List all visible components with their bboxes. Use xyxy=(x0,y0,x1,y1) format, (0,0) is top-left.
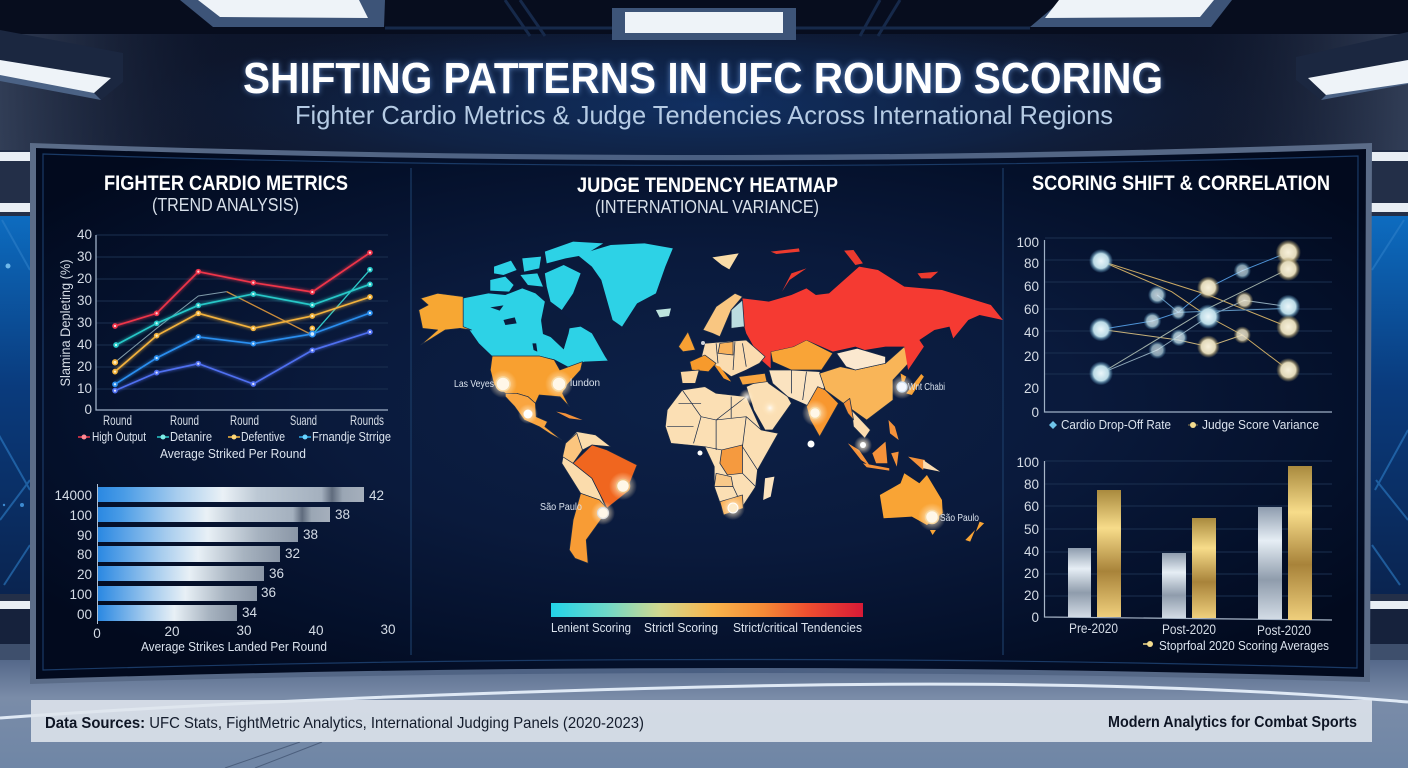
region: Argentina and Chile xyxy=(569,493,608,563)
bar chart: scoring averages: 80 xyxy=(1024,477,1039,492)
bar chart: scoring averages: 20 xyxy=(1024,566,1039,581)
hanging light: right xyxy=(1296,32,1408,100)
bar chart: average strikes landed: 34 xyxy=(242,605,258,620)
footer bar xyxy=(31,700,1372,742)
city labels: Las Veyes xyxy=(454,378,494,390)
line chart: stamina depletion xyxy=(58,227,388,428)
city labels: São Paulo xyxy=(940,512,979,524)
bar chart: average strikes landed: 30 xyxy=(236,623,252,638)
city labels: lundon xyxy=(570,377,600,389)
line chart: stamina depletion: Round xyxy=(170,413,199,428)
region: Eastern Europe xyxy=(701,340,765,377)
region: France xyxy=(690,355,716,372)
region: Scandinavia xyxy=(703,293,742,337)
line chart: stamina depletion: 30 xyxy=(77,315,92,330)
region: South America cream xyxy=(562,432,611,510)
heading: scoring shift and correlation: SCORING SHIFT & CORRELATION xyxy=(1032,172,1330,195)
line chart: stamina depletion: 20 xyxy=(77,359,92,374)
city labels: Wnt Chabi xyxy=(908,381,945,393)
scatter plot: cardio drop-off vs judge variance: 0 xyxy=(1031,405,1039,420)
bar chart: average strikes landed: 100 xyxy=(69,508,92,523)
line chart: stamina depletion: 30 xyxy=(77,249,92,264)
region: China xyxy=(820,347,910,420)
legend: line chart: Defentive xyxy=(241,429,285,444)
scatter plot: cardio drop-off vs judge variance: 60 xyxy=(1024,302,1039,317)
bar chart: scoring averages: 40 xyxy=(1024,544,1039,559)
line chart: stamina depletion: Rounds xyxy=(350,413,384,428)
scatter plot: cardio drop-off vs judge variance: 100 xyxy=(1016,235,1039,250)
floor xyxy=(0,660,1408,768)
region: South Africa xyxy=(720,495,743,515)
ceiling light: top left xyxy=(180,0,385,27)
world map xyxy=(419,242,1003,563)
bar chart: average strikes landed: 38 xyxy=(335,507,350,522)
caption: line chart: Average Striked Per Round xyxy=(160,446,306,461)
region: UK xyxy=(678,332,695,352)
subheading: international variance: (INTERNATIONAL VARIANCE) xyxy=(595,197,819,217)
ceiling light: top right xyxy=(1030,0,1232,27)
dark inlets of Canada xyxy=(490,305,571,352)
region: Myanmar xyxy=(843,398,854,420)
region: Africa xyxy=(665,387,778,513)
region: Papua New Guinea xyxy=(923,460,940,472)
line chart: stamina depletion: 40 xyxy=(77,227,92,242)
legend: scatter plot: Judge Score Variance xyxy=(1202,417,1319,432)
data sources: Data Sources: UFC Stats, FightMetric Analytics, International Judging Panels (2020-2023) xyxy=(45,715,644,732)
side wall display: right xyxy=(1370,150,1408,670)
ceiling light: top center xyxy=(612,8,796,40)
bar chart: average strikes landed: 36 xyxy=(269,566,284,581)
region: Madagascar xyxy=(763,477,774,500)
scatter plot: cardio drop-off vs judge variance: 20 xyxy=(1024,381,1039,396)
city labels xyxy=(454,377,979,524)
hanging light: left xyxy=(0,30,123,100)
region: Russian islands xyxy=(771,248,938,292)
heatmap legend: Lenient Scoring xyxy=(551,620,631,635)
line chart: stamina depletion: Round xyxy=(230,413,259,428)
region: India xyxy=(806,387,838,437)
bar chart: scoring averages: Pre-2020 xyxy=(1069,621,1118,636)
scatter plot: cardio drop-off vs judge variance: 80 xyxy=(1024,256,1039,271)
scatter plot: cardio drop-off vs judge variance: 20 xyxy=(1024,349,1039,364)
bar chart: average strikes landed: 14000 xyxy=(54,488,92,503)
bar chart: scoring averages: 60 xyxy=(1024,499,1039,514)
bar chart: average strikes landed: 100 xyxy=(69,587,92,602)
line chart: stamina depletion: 40 xyxy=(77,337,92,352)
bar chart: scoring averages: 50 xyxy=(1024,522,1039,537)
region: Angola xyxy=(714,473,733,487)
scatter plot: cardio drop-off vs judge variance xyxy=(1016,235,1332,420)
panel: judge tendency heatmap xyxy=(419,174,1003,635)
region: Brazil xyxy=(573,445,637,508)
city markers xyxy=(489,341,946,531)
heatmap legend: Strict/critical Tendencies xyxy=(733,620,862,635)
bar chart: average strikes landed xyxy=(54,484,396,641)
region: Spain xyxy=(680,370,699,383)
main screen frame xyxy=(30,143,1372,684)
panel: fighter cardio metrics xyxy=(54,172,396,654)
region: DR Congo xyxy=(720,445,742,475)
panel: scoring shift and correlation xyxy=(1016,172,1332,653)
city labels: São Paulo xyxy=(540,501,582,513)
subheading: trend analysis: (TREND ANALYSIS) xyxy=(152,195,299,215)
line chart: stamina depletion: Slamina Depleting (%) xyxy=(58,260,73,386)
bar chart: average strikes landed: 90 xyxy=(77,528,92,543)
region: Mexico and Central America xyxy=(505,393,562,440)
subtitle: Fighter Cardio Metrics & Judge Tendencies Across International Regions xyxy=(295,100,1113,130)
bar chart: scoring averages: Post-2020 xyxy=(1257,623,1311,638)
line chart: stamina depletion: Round xyxy=(103,413,132,428)
line chart: stamina depletion: 30 xyxy=(77,293,92,308)
region: Svalbard xyxy=(712,253,739,269)
region: Caribbean xyxy=(556,412,582,420)
bar chart: scoring averages xyxy=(1016,455,1332,638)
bar chart: scoring averages: 0 xyxy=(1031,610,1039,625)
region: Finland xyxy=(731,300,744,328)
region: Japan and Korea xyxy=(901,373,924,395)
legend: line chart: High Output xyxy=(92,429,146,444)
caption: bar chart: Average Strikes Landed Per Round xyxy=(141,639,327,654)
region: Middle East xyxy=(746,378,791,430)
region: Indonesia xyxy=(848,420,925,471)
legend: line chart xyxy=(78,429,391,444)
region: Russia xyxy=(742,267,1003,370)
line chart: stamina depletion: 0 xyxy=(84,402,92,417)
legend: scatter plot: Cardio Drop-Off Rate xyxy=(1061,417,1171,432)
heatmap legend xyxy=(551,603,863,635)
bar chart: average strikes landed: 38 xyxy=(303,527,318,542)
bar chart: average strikes landed: 32 xyxy=(285,546,300,561)
region: Canada mainland xyxy=(463,288,608,367)
region: Mongolia xyxy=(837,348,886,370)
bar chart: average strikes landed: 42 xyxy=(369,488,384,503)
region: Turkey xyxy=(739,373,767,385)
region: USA xyxy=(490,356,582,407)
region: Iceland xyxy=(656,308,671,317)
legend: line chart: Frnandje Strrige xyxy=(312,429,391,444)
bar chart: average strikes landed: 30 xyxy=(380,622,396,637)
region: Kazakhstan xyxy=(771,340,833,370)
region: Australia xyxy=(880,473,943,525)
region: Greenland xyxy=(578,243,673,327)
bar chart: average strikes landed: 20 xyxy=(164,624,180,639)
region: Colombia xyxy=(563,433,582,463)
line chart: stamina depletion: Suand xyxy=(290,413,317,428)
bar chart: average strikes landed: 00 xyxy=(77,607,92,622)
legend: scoring averages: Stoprfoal 2020 Scoring Averages xyxy=(1159,638,1329,653)
scatter plot: cardio drop-off vs judge variance: 40 xyxy=(1024,325,1039,340)
bar chart: average strikes landed: 80 xyxy=(77,547,92,562)
scatter plot: cardio drop-off vs judge variance: 60 xyxy=(1024,279,1039,294)
Africa borders xyxy=(667,390,761,507)
region: Tasmania and New Zealand xyxy=(930,522,984,542)
region: Poland xyxy=(718,342,733,355)
region: Italy xyxy=(714,365,731,382)
heading: judge tendency heatmap: JUDGE TENDENCY HEATMAP xyxy=(577,174,838,197)
heading: fighter cardio metrics: FIGHTER CARDIO METRICS xyxy=(104,172,348,195)
bar chart: average strikes landed: 40 xyxy=(308,623,324,638)
side wall display: left xyxy=(0,150,32,670)
bar chart: scoring averages: 20 xyxy=(1024,588,1039,603)
line chart: stamina depletion: 20 xyxy=(77,271,92,286)
legend: line chart: Detanire xyxy=(170,429,212,444)
bar chart: average strikes landed: 20 xyxy=(77,567,92,582)
bar chart: scoring averages: Post-2020 xyxy=(1162,622,1216,637)
tagline: Modern Analytics for Combat Sports xyxy=(1108,714,1357,731)
title: SHIFTING PATTERNS IN UFC ROUND SCORING xyxy=(243,54,1163,103)
line chart: stamina depletion: 10 xyxy=(77,381,92,396)
region: South-East Asia xyxy=(852,410,870,438)
bar chart: average strikes landed: 0 xyxy=(93,626,101,641)
bar chart: scoring averages: 100 xyxy=(1016,455,1039,470)
heatmap legend: Strictl Scoring xyxy=(644,620,718,635)
region: Canadian Arctic islands xyxy=(490,242,603,310)
legend: scatter plot xyxy=(1049,417,1319,432)
region: Iran and Central Asia xyxy=(769,370,825,407)
region: Alaska xyxy=(419,293,471,345)
bar chart: average strikes landed: 36 xyxy=(261,585,276,600)
